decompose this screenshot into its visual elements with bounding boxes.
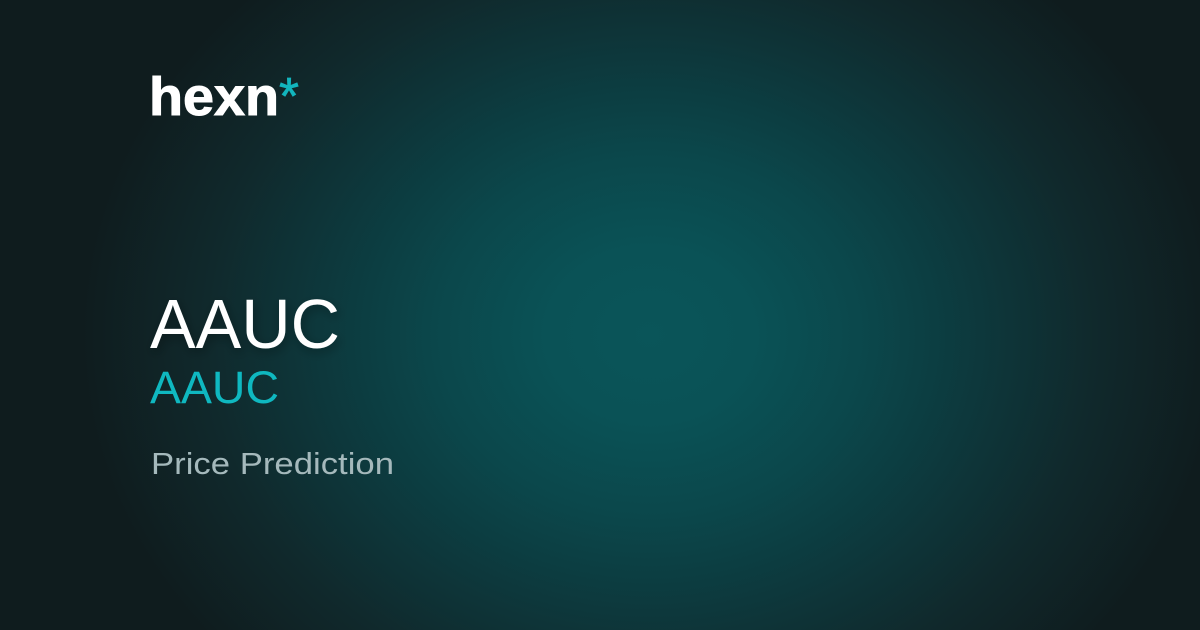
subtitle: ticker AAUC: AAUC <box>150 362 279 413</box>
title: AAUC: AAUC <box>150 285 340 363</box>
logo: hexn*: hexn <box>149 67 279 127</box>
logo asterisk: * <box>279 68 299 126</box>
caption: Price Prediction: Price Prediction <box>151 446 394 481</box>
